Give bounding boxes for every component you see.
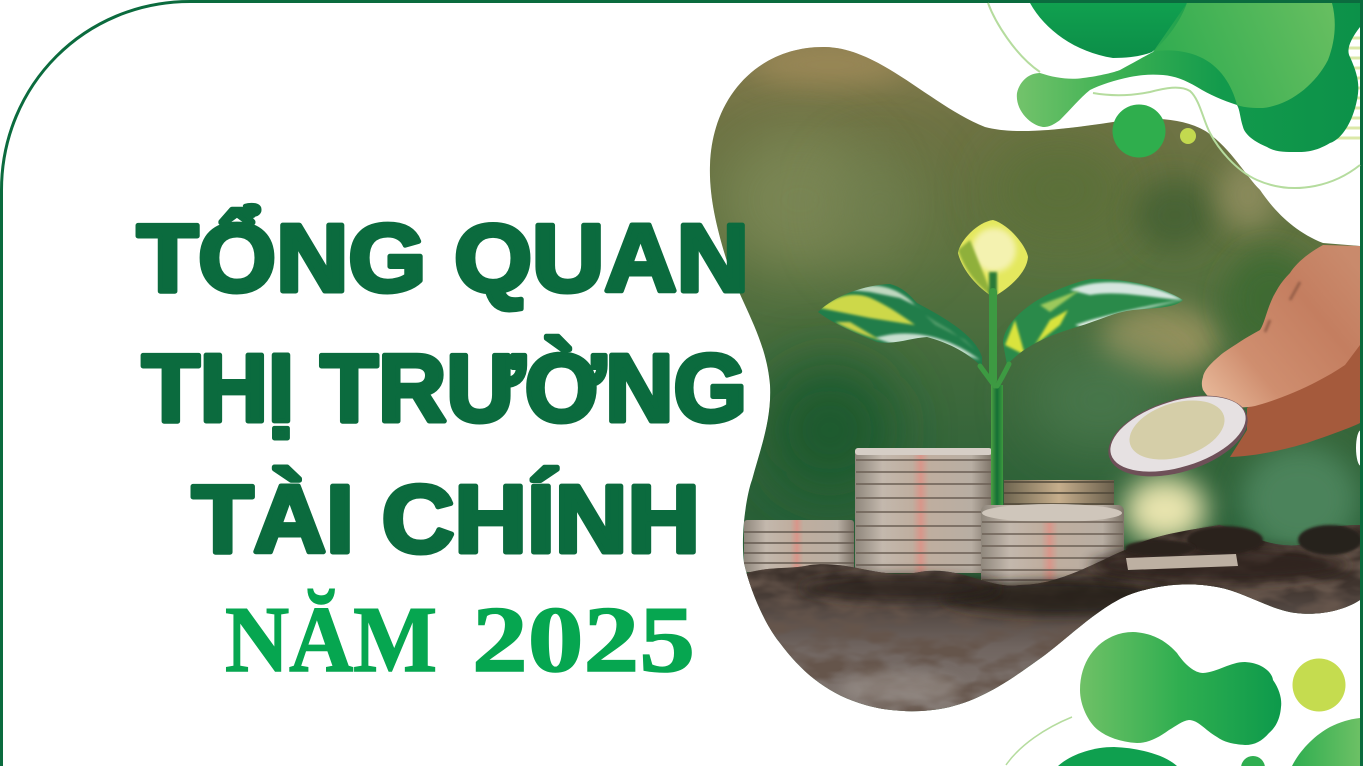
leaf: left (818, 284, 982, 364)
title (137, 204, 749, 573)
lower finger (1230, 335, 1360, 457)
coin in hand (1108, 396, 1248, 476)
title line 1: TỔNG QUAN (137, 204, 749, 312)
plant branches and upper stem (980, 292, 1009, 386)
decoration: bottom right green blobs (1058, 632, 1360, 766)
flat coin on soil (1126, 554, 1238, 570)
white sliver at right edge (1356, 430, 1363, 466)
photo background (700, 40, 1363, 720)
frame: right edge (1360, 0, 1363, 766)
light green circle shape (1153, 3, 1335, 108)
lime dot (1180, 128, 1196, 144)
leaf: top (958, 220, 1028, 295)
title line 3: TÀI CHÍNH (192, 466, 700, 573)
photo: seedling on coins in blob shape (700, 40, 1363, 730)
tall coin stack (855, 448, 992, 573)
dark green top shape (1030, 3, 1187, 58)
year: 2025: 2025 (472, 588, 695, 692)
front coin stack (981, 504, 1124, 589)
year heading (225, 588, 695, 692)
green circle (1112, 104, 1166, 158)
stripes (1335, 38, 1360, 138)
word: năm: NĂM (225, 588, 437, 692)
decoration: thin line curves (988, 3, 1360, 765)
decoration: top right green blobs (1017, 3, 1360, 158)
left coin stack (744, 520, 854, 572)
back coin stack (1004, 480, 1114, 505)
thumb (1202, 245, 1360, 407)
flowing green body (1017, 3, 1360, 152)
plant stem (991, 385, 1003, 511)
soil (746, 523, 1360, 712)
hand (1202, 245, 1360, 457)
title line 2: THỊ TRƯỜNG (142, 335, 747, 442)
leaf: right (1003, 278, 1183, 363)
